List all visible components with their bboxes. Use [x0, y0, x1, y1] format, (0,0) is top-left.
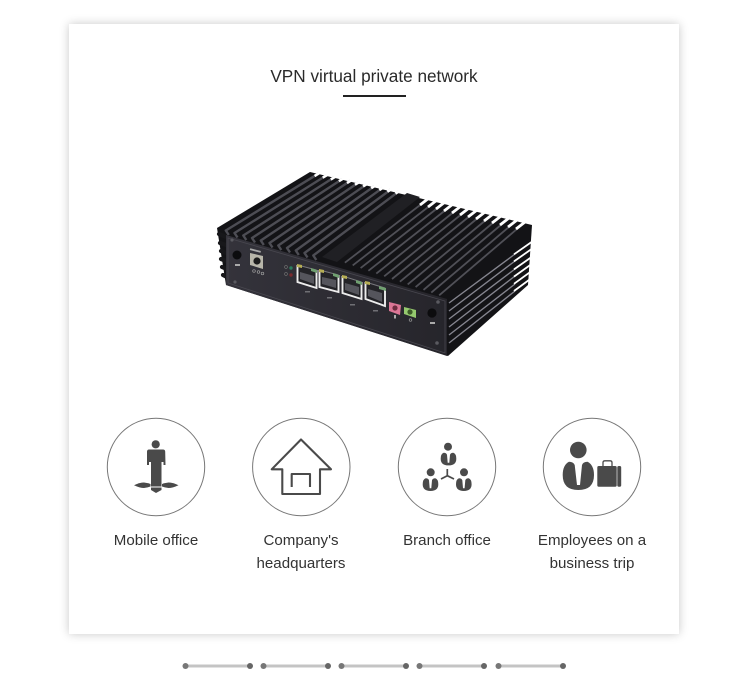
device top fins right [345, 198, 525, 295]
panel: white card [69, 24, 679, 634]
label: mobile office: Mobile office [114, 532, 198, 549]
icon: mobile office person with arrows [106, 418, 206, 516]
device left side teeth [219, 234, 229, 278]
power jack [250, 248, 264, 275]
device centre band [322, 193, 420, 262]
port labels [305, 291, 378, 312]
device base silhouette [217, 172, 532, 356]
screw holes [232, 250, 437, 324]
device right side fins [449, 241, 533, 343]
RJ45 port 3 [342, 275, 362, 299]
label: employees on a business trip: Employees on a [538, 532, 646, 549]
label: employees on a business trip: business trip [550, 555, 634, 572]
RJ45 port 1 [297, 264, 317, 288]
icon: branch office three people [398, 418, 496, 516]
label: employees on a business trip [538, 532, 646, 572]
device top fins left [226, 173, 400, 260]
icon: company headquarters house [252, 418, 350, 516]
label: company's headquarters: Company's [263, 532, 339, 549]
audio jack pink [389, 302, 401, 318]
audio jack green [404, 307, 416, 321]
RJ45 port 4 [365, 281, 386, 306]
decorative binder bars [182, 663, 566, 669]
title: VPN virtual private network [270, 66, 478, 86]
label: company's headquarters [257, 532, 345, 572]
device front panel [226, 235, 447, 356]
label: company's headquarters: headquarters [257, 555, 345, 572]
title underline [343, 95, 406, 97]
icon: employees on a business trip [542, 418, 642, 516]
RJ45 port 2 [319, 269, 339, 292]
label: branch office: Branch office [403, 532, 491, 549]
status LEDs [285, 266, 293, 277]
